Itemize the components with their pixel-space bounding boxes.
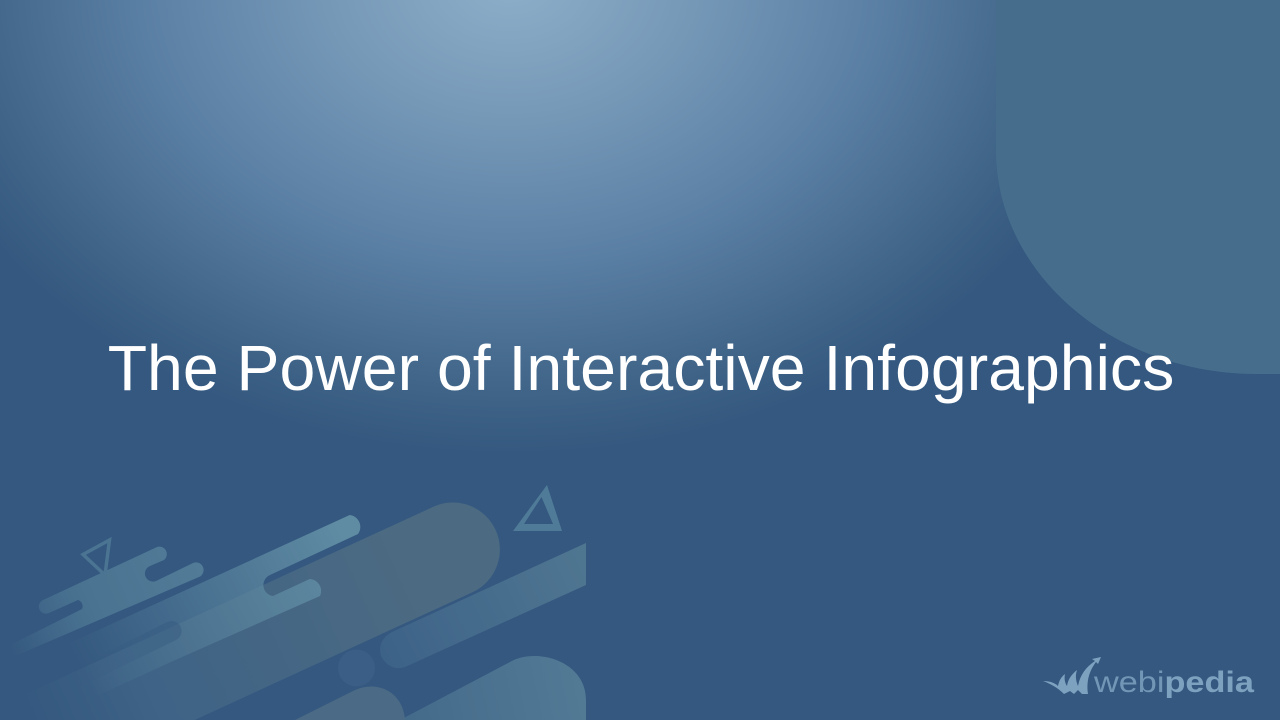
shape: bottom pill — [295, 687, 405, 720]
shape: slanted band — [380, 543, 586, 668]
logo: webipedia — [1043, 657, 1254, 699]
rounded corner panel — [996, 0, 1280, 374]
shape: long streak — [0, 515, 360, 716]
shape: dark streak notch — [60, 621, 182, 692]
shape: small streak — [10, 547, 204, 657]
title: The Power of Interactive Infographics — [108, 332, 1174, 404]
icon: outlined triangle right — [513, 485, 562, 531]
shape: large pill — [0, 503, 500, 720]
logo text: webi pedia — [1093, 666, 1254, 699]
icon: outlined triangle left — [83, 540, 110, 575]
shape: corner pill — [400, 656, 586, 720]
shape: faint circle — [338, 650, 375, 686]
decorative diagonal shapes — [0, 503, 586, 720]
icon: logo swoosh with arrow — [1043, 657, 1101, 694]
background glow — [0, 0, 1280, 460]
